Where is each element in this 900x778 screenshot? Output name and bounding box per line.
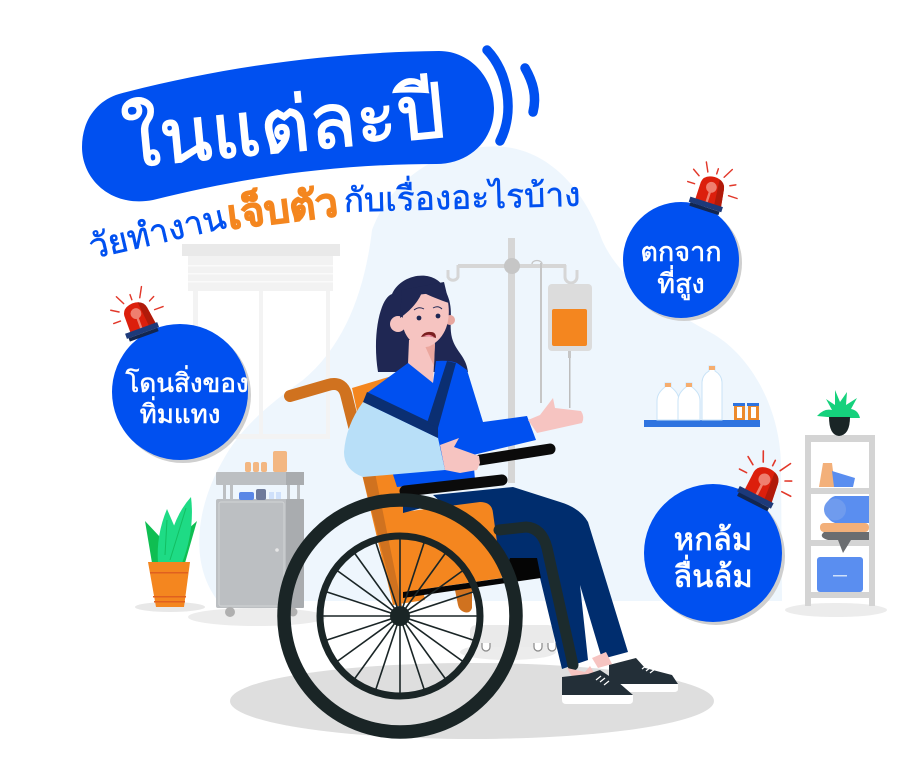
title text: ในแต่ละปี (119, 68, 448, 184)
callout: struck by objects: ทิ่มแทง (140, 396, 220, 429)
subtitle (85, 171, 581, 267)
subtitle: เจ็บตัว (224, 177, 340, 238)
woman: neck and face (390, 282, 455, 384)
siren (681, 158, 745, 219)
wall shelf with bottles (644, 366, 760, 427)
woman: blue shirt (367, 361, 536, 487)
main wheel (284, 500, 516, 732)
callout: slips and falls (644, 444, 804, 625)
callout: falling from height: ที่สูง (657, 265, 705, 300)
background blob (199, 147, 782, 601)
sound arcs (487, 50, 535, 141)
callout: struck by objects: โดนสิ่งของ (125, 365, 249, 398)
wheelchair back and handle (290, 376, 472, 612)
medical cart (188, 451, 326, 626)
shelf plant (817, 390, 860, 436)
subtitle: กับเรื่องอะไรบ้าง (343, 171, 581, 220)
title banner (82, 51, 494, 201)
callout: slips and falls: ลื่นล้ม (673, 555, 753, 594)
siren (728, 444, 804, 518)
window (182, 244, 340, 439)
floor shadow (230, 663, 714, 739)
callout: slips and falls: หกล้ม (674, 522, 752, 557)
callout: falling from height: ตกจาก (640, 237, 722, 267)
callout: struck by objects (105, 282, 251, 463)
siren (105, 282, 170, 345)
potted plant (135, 497, 205, 612)
storage shelf (785, 435, 887, 617)
woman: left hand (440, 438, 480, 473)
iv stand base (460, 625, 556, 660)
wheelchair armrests (405, 449, 550, 491)
woman: hair (376, 276, 468, 372)
woman: sling (344, 361, 456, 477)
woman: right hand (528, 398, 583, 433)
callout: falling from height (623, 158, 745, 321)
wheelchair seat (403, 498, 573, 665)
shoes (562, 652, 678, 704)
woman: pants (433, 487, 628, 669)
subtitle: วัยทำงาน (85, 198, 230, 267)
iv stand (448, 238, 592, 483)
